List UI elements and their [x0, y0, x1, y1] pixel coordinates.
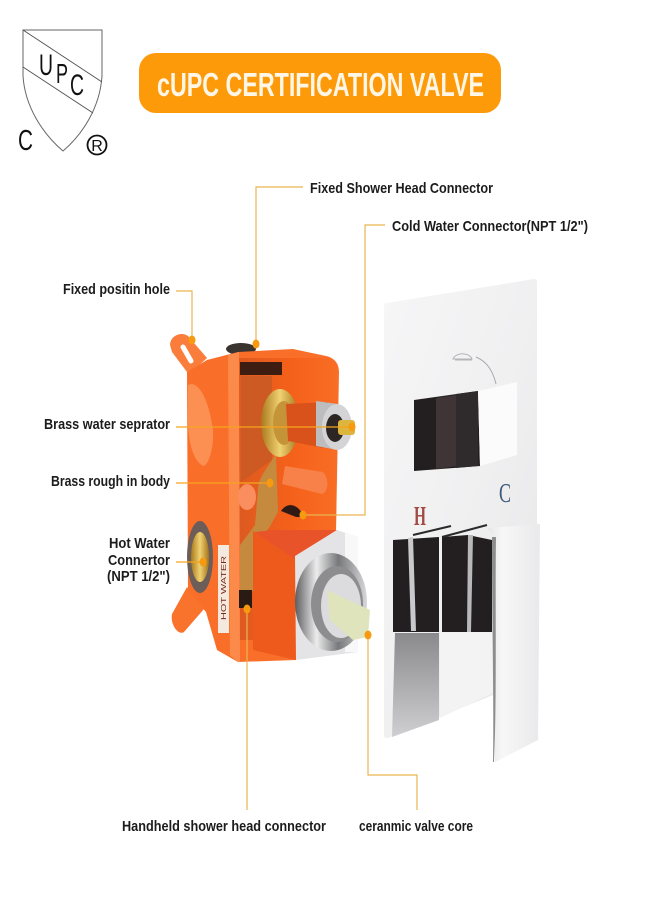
- brass flange: [261, 389, 299, 457]
- orange housing: [187, 349, 339, 662]
- diverter icon: [453, 354, 472, 360]
- C label: C: [499, 478, 511, 508]
- translucent lid corner: [255, 530, 337, 558]
- cold water opening: [281, 505, 304, 517]
- rough-in valve body: [170, 334, 355, 662]
- hot water port: [187, 521, 213, 593]
- hot water sticker: [218, 545, 229, 633]
- label: fixed position hole: Fixed positin hole: [63, 281, 170, 298]
- label: hot water connector: Connertor: [108, 552, 170, 569]
- H label: H: [414, 501, 426, 531]
- label: brass water separator: Brass water seprator: [44, 416, 170, 433]
- label: fixed shower head connector: Fixed Shower Head Connector: [310, 180, 493, 197]
- lever handle faces: [392, 633, 439, 737]
- cUPC shield logo: C: [18, 125, 33, 157]
- standoff posts: [282, 466, 327, 494]
- chrome cartridge housing: [295, 530, 370, 660]
- cUPC shield logo: P: [56, 58, 68, 89]
- title banner: cUPC CERTIFICATION VALVE: [157, 66, 484, 103]
- label: ceramic valve core: ceranmic valve core: [359, 818, 473, 835]
- diverter knob: [414, 391, 480, 471]
- leader lines and dots: [176, 187, 417, 810]
- title banner: [139, 53, 501, 113]
- inner cavity: [239, 358, 338, 640]
- cover panel: [253, 531, 296, 660]
- trim plate with diverter and lever: [384, 279, 540, 762]
- label: brass rough in body: Brass rough in body: [51, 473, 171, 490]
- label: handheld shower head connector: Handheld shower head connector: [122, 818, 326, 835]
- top dark fitting: [226, 343, 256, 355]
- rough-in valve body: HOT WATER: [221, 556, 228, 620]
- label: hot water connector: [107, 535, 170, 585]
- cUPC shield logo: C: [70, 69, 84, 102]
- label: hot water connector: Hot Water: [109, 535, 170, 552]
- lever handle dark recess: [393, 537, 439, 632]
- mounting ears: [170, 334, 207, 372]
- label: hot water connector: (NPT 1/2"): [107, 568, 170, 585]
- cUPC shield logo: U: [39, 49, 53, 82]
- brass stem: [240, 454, 278, 595]
- cUPC shield logo: [18, 30, 106, 157]
- label: cold water connector: Cold Water Connector(NPT 1/2"): [392, 218, 588, 235]
- cUPC shield logo: R: [91, 138, 103, 155]
